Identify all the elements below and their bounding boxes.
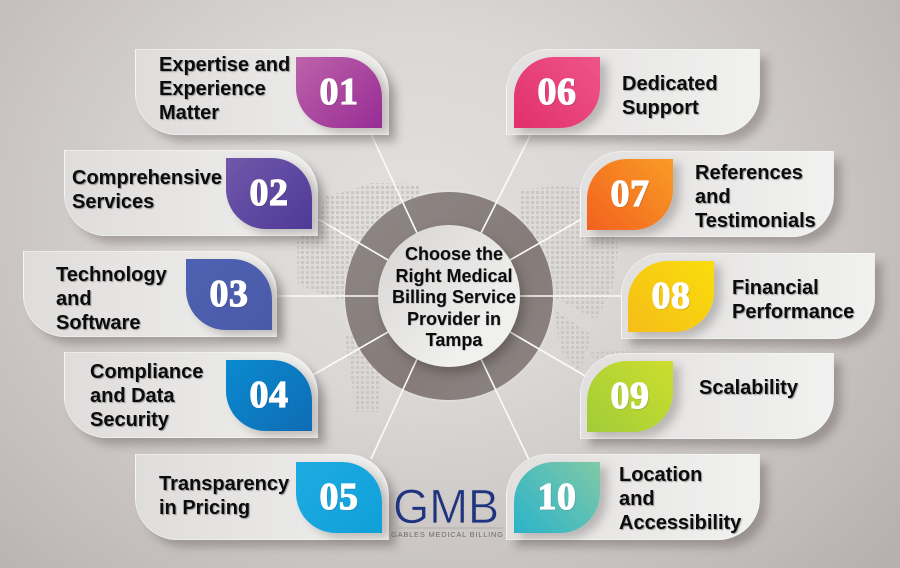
logo: GMB: GABLES MEDICAL BILLING <box>391 530 503 539</box>
badge 10 <box>514 462 600 533</box>
badge 02: 02 <box>250 172 288 214</box>
badge 05: 05 <box>320 476 358 518</box>
central ring <box>345 192 553 400</box>
card 07 <box>580 151 834 237</box>
card 01 <box>135 49 389 135</box>
label 07 <box>695 162 816 232</box>
label 07: References <box>695 162 803 184</box>
badge 05 <box>296 462 382 533</box>
badge 04: 04 <box>250 374 288 416</box>
badge 03: 03 <box>210 273 248 315</box>
label 04 <box>90 361 204 432</box>
card 06 <box>506 49 760 135</box>
label 03 <box>56 264 168 334</box>
badge 07 <box>587 159 673 230</box>
card 10 <box>506 454 760 540</box>
central circle heading: Provider in <box>407 308 501 328</box>
label 09: Scalability <box>699 377 798 399</box>
label 07: Testimonials <box>695 210 816 232</box>
label 08: Financial <box>732 277 819 299</box>
central circle heading: Billing Service <box>392 287 516 307</box>
badge 10: 10 <box>538 476 576 518</box>
central circle heading: Choose the <box>405 244 503 264</box>
label 02 <box>72 167 223 213</box>
central circle heading: Right Medical <box>395 266 512 286</box>
label 01: Expertise and <box>159 54 290 76</box>
badge 07: 07 <box>610 173 650 215</box>
badge 06 <box>514 57 600 128</box>
label 10 <box>619 464 742 534</box>
label 01 <box>159 54 290 124</box>
card 05 <box>135 454 389 540</box>
label 10: and <box>619 488 655 510</box>
label 05: in Pricing <box>159 497 250 519</box>
label 02: Services <box>72 191 154 213</box>
label 06 <box>622 73 718 120</box>
label 08: Performance <box>732 301 854 323</box>
label 10: Accessibility <box>619 512 741 534</box>
label 10: Location <box>619 464 702 486</box>
badge 09 <box>587 361 673 432</box>
card 04 <box>64 352 318 438</box>
central circle heading <box>378 225 520 367</box>
label 05 <box>159 473 290 520</box>
label 05: Transparency <box>159 473 289 495</box>
label 08 <box>732 277 855 323</box>
label 06: Support <box>622 97 699 119</box>
label 02: Comprehensive <box>72 167 222 189</box>
label 04: and Data <box>90 385 174 407</box>
central circle heading: Tampa <box>426 330 482 350</box>
badge 02 <box>226 158 312 229</box>
badge 01: 01 <box>320 71 358 113</box>
logo: GMB: GMB <box>393 481 499 534</box>
label 04: Compliance <box>90 361 203 383</box>
badge 09: 09 <box>610 375 650 417</box>
label 03: Software <box>56 312 140 334</box>
badge 06: 06 <box>538 71 576 113</box>
label 06: Dedicated <box>622 73 718 95</box>
label 07: and <box>695 186 731 208</box>
card 08 <box>621 253 875 339</box>
card 02 <box>64 150 318 236</box>
label 01: Experience <box>159 78 266 100</box>
badge 03 <box>186 259 272 330</box>
label 03: and <box>56 288 92 310</box>
card 03 <box>23 251 277 337</box>
badge 08: 08 <box>652 275 690 317</box>
card 09 <box>580 353 834 439</box>
label 03: Technology <box>56 264 167 286</box>
badge 01 <box>296 57 382 128</box>
label 04: Security <box>90 409 169 431</box>
badge 08 <box>628 261 714 332</box>
label 01: Matter <box>159 102 219 124</box>
badge 04 <box>226 360 312 431</box>
